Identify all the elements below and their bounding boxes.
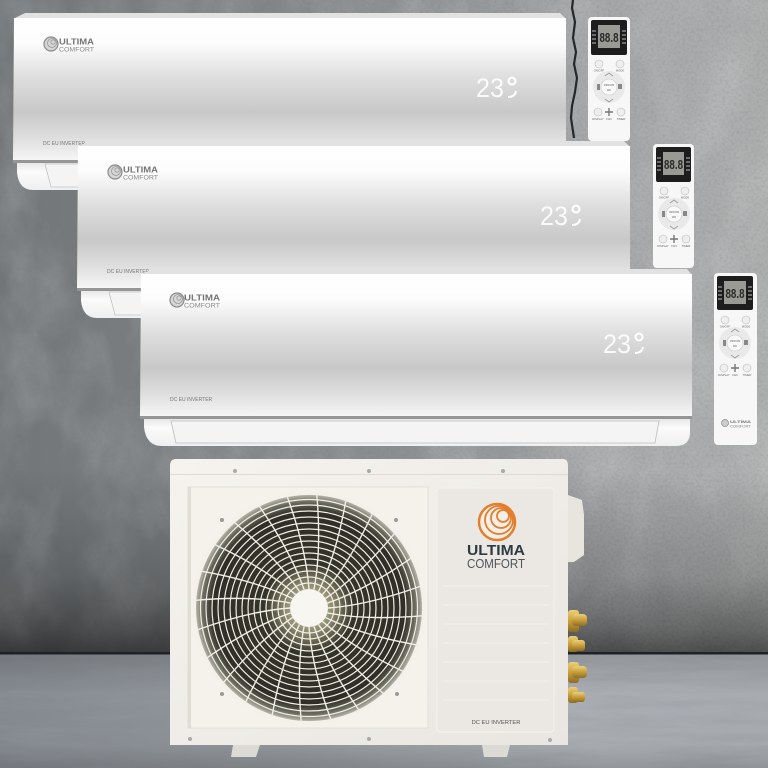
- remote control 2: TIMER: [682, 244, 690, 248]
- remote control 3: COMFORT: [730, 424, 751, 428]
- remote control 3: ON/OFF: [720, 324, 731, 328]
- remote control 2: 88.8: [664, 157, 683, 172]
- remote control 2: OK: [672, 215, 676, 219]
- remote control 1: [588, 17, 630, 141]
- remote control 1: MODE: [616, 68, 624, 72]
- remote control 1: 88.8: [600, 30, 618, 45]
- orange logo and brand name: ULTIMA: [467, 542, 525, 559]
- remote control 3: ULTIMA: [730, 420, 751, 424]
- remote control 2: MODE: [681, 196, 689, 200]
- remote control 2: DISPLAY: [657, 244, 669, 248]
- remote control 2: OFF/ON: [669, 210, 679, 214]
- remote control 1: OK: [607, 88, 611, 92]
- indoor unit 2: [77, 141, 630, 318]
- logo: unit 1: ULTIMA: [59, 38, 94, 46]
- orange logo and brand name: [467, 504, 525, 571]
- indoor unit 2: DC EU INVERTER: [107, 269, 150, 275]
- orange logo and brand name: COMFORT: [467, 557, 525, 571]
- logo: unit 3: ULTIMA: [184, 294, 220, 302]
- logo: unit 3: COMFORT: [184, 302, 220, 310]
- outdoor unit feet: [231, 745, 510, 757]
- indoor unit 2: 23: [540, 201, 568, 231]
- remote control 2: FAN: [671, 244, 677, 248]
- remote control 3: FAN: [732, 373, 738, 377]
- remote control 3: 88.8: [726, 286, 744, 301]
- remote control 3: TIMER: [743, 373, 751, 377]
- indoor unit 3: DC EU INVERTER: [170, 397, 213, 403]
- logo: unit 2: COMFORT: [123, 174, 158, 182]
- remote control 1: TIMER: [617, 117, 625, 121]
- outdoor unit inverter label: DC EU INVERTER: [472, 720, 520, 726]
- logo: unit 1: [44, 37, 94, 54]
- remote control 2: [653, 144, 694, 268]
- outdoor unit brass valves: [568, 610, 587, 703]
- logo: unit 2: [108, 165, 158, 182]
- remote control 3: OFF/ON: [730, 339, 740, 343]
- indoor unit 1: 23: [476, 73, 504, 103]
- outdoor unit casing: [170, 459, 568, 745]
- remote control 1: ON/OFF: [594, 68, 605, 72]
- indoor unit 1: DC EU INVERTER: [43, 141, 86, 147]
- remote control 1: DISPLAY: [592, 117, 604, 121]
- logo: unit 1: COMFORT: [59, 46, 94, 54]
- indoor unit 3: [140, 269, 692, 446]
- indoor unit 1: [13, 13, 566, 190]
- logo: unit 3: [170, 293, 220, 310]
- logo: unit 2: ULTIMA: [123, 166, 158, 174]
- fan panel recess: [188, 487, 428, 728]
- right front panel: [437, 488, 554, 732]
- remote control 3: MODE: [742, 324, 750, 328]
- fan grille: [192, 491, 426, 725]
- wall crack: [571, 0, 577, 138]
- remote control 3: OK: [733, 344, 737, 348]
- remote control 1: FAN: [606, 117, 612, 121]
- remote control 2: ON/OFF: [659, 196, 670, 200]
- background: concrete floor: [0, 652, 768, 768]
- indoor unit 3: 23: [603, 329, 631, 359]
- outdoor unit side connector box: [568, 495, 584, 562]
- casing top seam and screws: [170, 469, 568, 742]
- remote control 1: OFF/ON: [604, 83, 614, 87]
- remote control 3: DISPLAY: [718, 373, 730, 377]
- remote control 3: [714, 273, 757, 445]
